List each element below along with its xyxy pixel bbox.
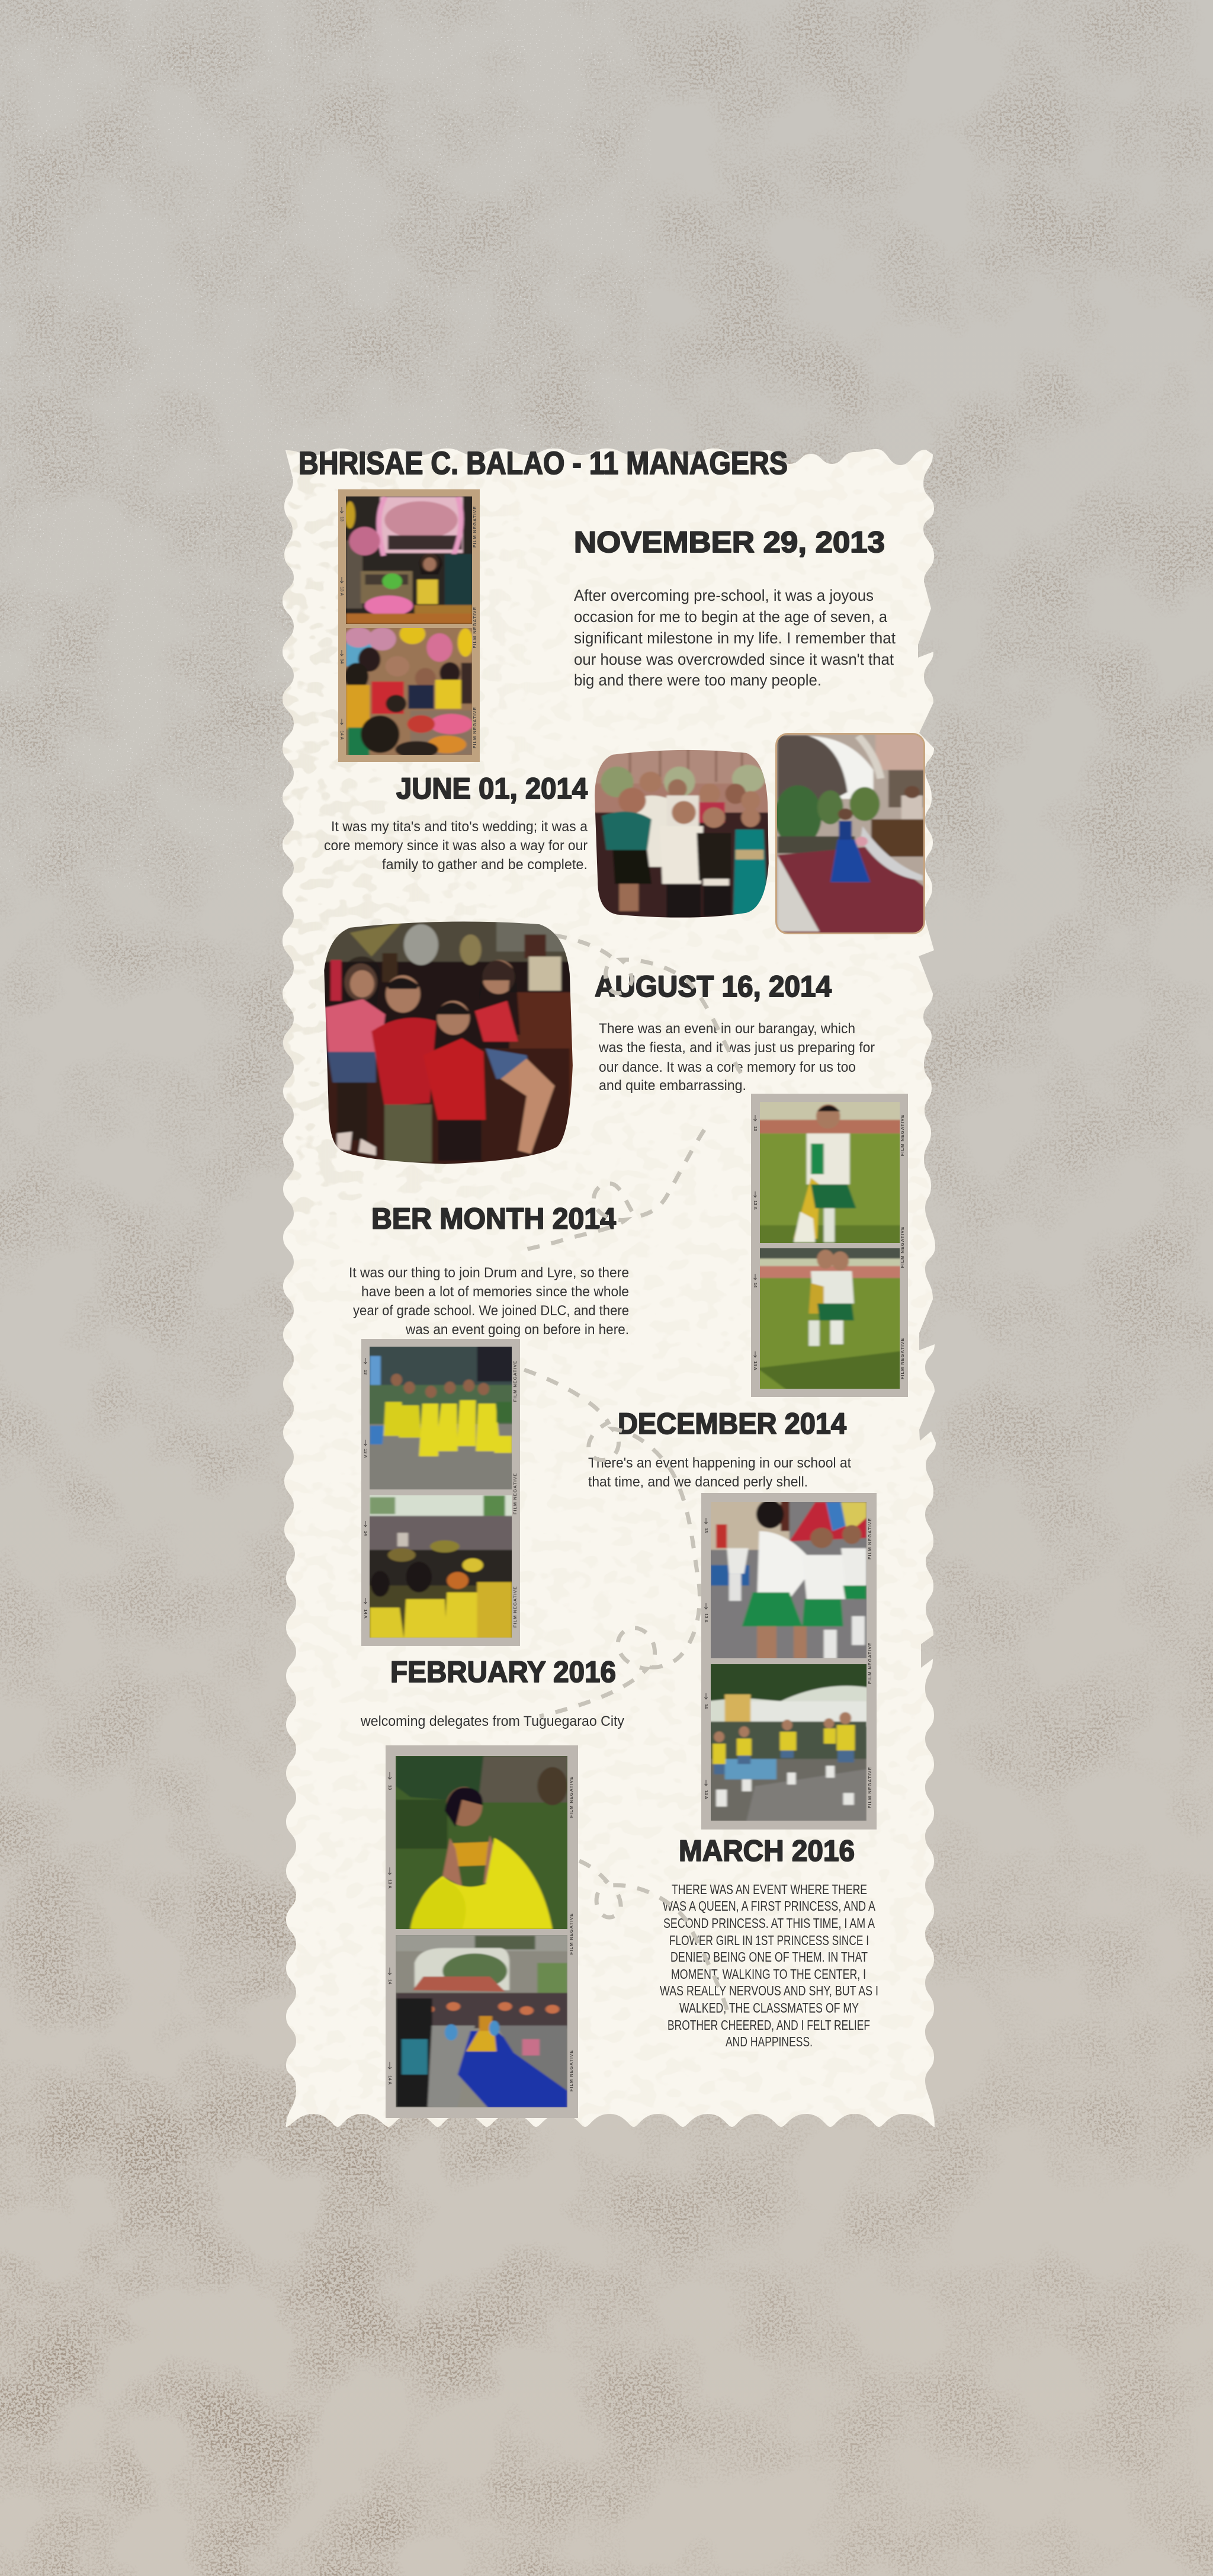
labels: film negative marks: 14 xyxy=(363,1531,368,1536)
photo: majorette on field xyxy=(757,1101,903,1246)
photo: birthday banner and cake xyxy=(346,496,472,624)
photo: majorettes on track xyxy=(757,1246,903,1392)
labels: film negative marks: FILM NEGATIVE xyxy=(512,1586,518,1627)
dashed path: December loop to February text xyxy=(524,1370,700,1716)
labels: film negative marks: FILM NEGATIVE xyxy=(472,506,477,547)
heading: August 16, 2014: AUGUST 16, 2014 xyxy=(595,970,832,1003)
text: November story: After overcoming pre-school, it was a joyous xyxy=(574,587,874,604)
text: March story: WALKED, THE CLASSMATES OF MY xyxy=(679,2000,859,2016)
labels: film negative marks: 14 xyxy=(753,1283,758,1288)
labels: film negative marks: 13 xyxy=(387,1785,393,1790)
text: March story: AND HAPPINESS. xyxy=(726,2034,813,2049)
heading: November 29, 2013: NOVEMBER 29, 2013 xyxy=(574,526,885,559)
photo: dancers lined up xyxy=(367,1344,516,1492)
labels: film negative marks: 13 xyxy=(753,1126,758,1131)
text: November story: occasion for me to begin at the age of seven, a xyxy=(574,608,888,626)
labels: film negative marks: FILM NEGATIVE xyxy=(472,707,477,748)
labels: film negative marks: 13 A xyxy=(753,1200,758,1210)
labels: film negative marks: FILM NEGATIVE xyxy=(569,1913,574,1955)
photo: party kids and balloons xyxy=(341,624,479,758)
labels: film negative marks: 14 A xyxy=(339,730,345,740)
labels: film negative marks: 14 A xyxy=(387,2075,393,2085)
labels: film negative marks: FILM NEGATIVE xyxy=(867,1767,872,1808)
film strip 5: flower girl xyxy=(386,1745,578,2118)
film strip 1: birthday xyxy=(338,489,480,762)
text: November story xyxy=(574,587,896,689)
text: August story xyxy=(598,1021,875,1094)
title: BHRISAE C. BALAO - 11 MANAGERS xyxy=(299,446,788,481)
labels: film negative marks: FILM NEGATIVE xyxy=(900,1226,905,1268)
text: Ber month story: It was our thing to join Drum and Lyre, so there xyxy=(349,1265,629,1281)
text: Ber month story xyxy=(349,1265,629,1338)
text: Ber month story: year of grade school. We joined DLC, and there xyxy=(353,1303,629,1319)
text: August story: our dance. It was a core memory for us too xyxy=(599,1059,856,1075)
labels: film negative marks: 13 A xyxy=(363,1449,368,1458)
labels: film negative marks xyxy=(387,1772,574,2091)
photo: girl in yellow gown xyxy=(393,1755,570,1930)
heading: March 2016: MARCH 2016 xyxy=(679,1834,855,1867)
labels: film negative marks: FILM NEGATIVE xyxy=(569,1776,574,1818)
film strip 2: drum and lyre field xyxy=(751,1094,908,1397)
labels: film negative marks: FILM NEGATIVE xyxy=(512,1473,518,1514)
text: Ber month story: was an event going on before in here. xyxy=(405,1322,629,1338)
labels: film negative marks: 13 xyxy=(363,1370,368,1374)
photo: stage walk on blue carpet xyxy=(393,1933,570,2110)
labels: film negative marks: FILM NEGATIVE xyxy=(512,1360,518,1402)
text: November story: significant milestone in my life. I remember that xyxy=(574,629,896,647)
labels: film negative marks: FILM NEGATIVE xyxy=(472,607,477,648)
dashed path: strip to Ber month text xyxy=(518,1130,704,1251)
text: August story: and quite embarrassing. xyxy=(599,1078,746,1094)
text: March story: MOMENT, WALKING TO THE CENTER, I xyxy=(671,1966,866,1982)
labels: film negative marks: 13 A xyxy=(704,1613,709,1623)
labels: film negative marks: 14 A xyxy=(753,1361,758,1370)
text: March story: WAS A QUEEN, A FIRST PRINCESS, AND A xyxy=(663,1898,876,1914)
labels: film negative marks: 14 xyxy=(339,659,345,664)
panel: torn cream paper xyxy=(278,444,942,2133)
text: March story: THERE WAS AN EVENT WHERE THERE xyxy=(672,1882,867,1897)
labels: film negative marks: 14 xyxy=(704,1704,709,1709)
text: March story: FLOWER GIRL IN 1ST PRINCESS SINCE I xyxy=(669,1933,869,1948)
text: Ber month story: have been a lot of memories since the whole xyxy=(361,1284,629,1300)
text: December story: that time, and we danced perly shell. xyxy=(588,1474,808,1490)
photo: August kids group xyxy=(320,918,578,1167)
text: December story xyxy=(588,1455,851,1490)
dashed path: August photo to strip xyxy=(554,935,742,1075)
labels: film negative marks xyxy=(704,1518,872,1808)
photo: yellow shirts in rain xyxy=(708,1662,871,1824)
heading: December 2014: DECEMBER 2014 xyxy=(618,1407,846,1440)
photo: wedding group xyxy=(591,746,772,923)
text: March story: DENIED BEING ONE OF THEM. IN THAT xyxy=(670,1949,868,1965)
text: February story: welcoming delegates from Tuguegarao City xyxy=(360,1713,624,1729)
labels: film negative marks: 13 xyxy=(704,1528,709,1533)
labels: film negative marks: 14 A xyxy=(704,1790,709,1799)
film strip 4: majorettes in school xyxy=(701,1493,877,1830)
labels: film negative marks: FILM NEGATIVE xyxy=(867,1642,872,1684)
labels: film negative marks xyxy=(753,1114,905,1379)
heading: February 2016: FEBRUARY 2016 xyxy=(390,1655,616,1689)
heading: June 01, 2014: JUNE 01, 2014 xyxy=(396,772,588,805)
labels: film negative marks: 14 xyxy=(387,1979,393,1985)
text: December story: There's an event happening in our school at xyxy=(588,1455,851,1471)
text: March story: WAS REALLY NERVOUS AND SHY, BUT AS I xyxy=(660,1983,878,1998)
labels: film negative marks: 13 A xyxy=(387,1879,393,1889)
labels: film negative marks: FILM NEGATIVE xyxy=(900,1338,905,1379)
text: June story xyxy=(324,819,588,873)
photo: church aisle xyxy=(772,732,927,937)
text: November story: our house was overcrowded since it wasn't that xyxy=(574,651,894,668)
film strip 3: yellow dancers xyxy=(361,1339,520,1646)
text: March story: BROTHER CHEERED, AND I FELT RELIEF xyxy=(668,2017,870,2033)
labels: film negative marks: FILM NEGATIVE xyxy=(569,2050,574,2091)
heading: Ber Month 2014: BER MONTH 2014 xyxy=(371,1202,616,1235)
text: June story: core memory since it was also a way for our xyxy=(324,838,588,854)
labels: film negative marks xyxy=(363,1358,518,1627)
text: November story: big and there were too many people. xyxy=(574,671,821,689)
labels: film negative marks xyxy=(339,506,477,748)
dashed path: February strip to March text xyxy=(579,1861,729,2017)
labels: film negative marks: 13 xyxy=(339,517,345,521)
text: August story: There was an event in our barangay, which xyxy=(599,1021,855,1037)
text: March story: SECOND PRINCESS. AT THIS TIME, I AM A xyxy=(663,1915,875,1931)
text: August story: was the fiesta, and it was just us preparing for xyxy=(598,1040,875,1056)
photo: dancers in crowd xyxy=(367,1494,516,1640)
labels: film negative marks: FILM NEGATIVE xyxy=(867,1518,872,1559)
text: March story xyxy=(660,1882,878,2049)
photo: majorettes in gym xyxy=(708,1499,871,1662)
text: June story: It was my tita's and tito's wedding; it was a xyxy=(331,819,588,835)
labels: film negative marks: 13 A xyxy=(339,587,345,596)
labels: film negative marks: FILM NEGATIVE xyxy=(900,1114,905,1156)
labels: film negative marks: 14 A xyxy=(363,1609,368,1619)
text: June story: family to gather and be complete. xyxy=(382,857,588,873)
